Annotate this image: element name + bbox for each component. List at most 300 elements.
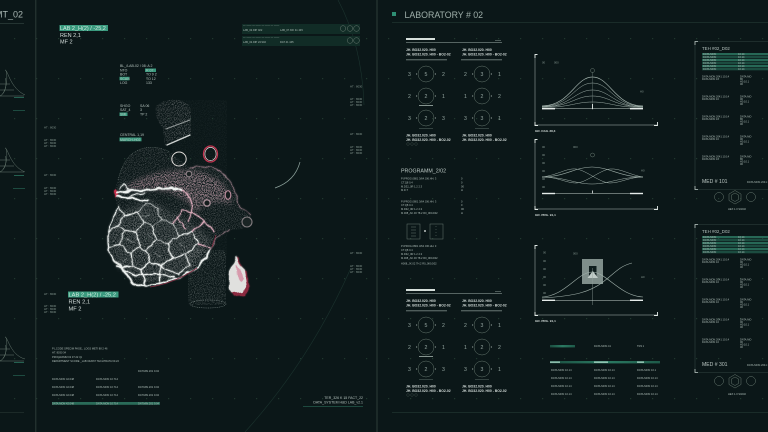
bright arc	[275, 162, 300, 188]
readout: LAB 2 lower: MF 2	[68, 306, 81, 312]
program icons	[407, 224, 443, 239]
laboratory header: LABORATORY # 02	[404, 10, 483, 20]
chart: bell curves: H0	[640, 90, 644, 94]
left tick labels: HT : 8030	[44, 186, 57, 190]
data rows: DATA.MON.2041 10.14	[702, 258, 730, 262]
chart: crossing waves: 00	[542, 153, 546, 157]
right tick labels: HT : 8030	[350, 132, 363, 136]
marker box	[582, 259, 603, 284]
bottom centre table: DATA.MON 10.14	[637, 384, 658, 388]
green rows: DATA.MON	[703, 64, 716, 68]
dial group bottom: JH. BO32.020. H00 - BO2-02	[406, 304, 451, 308]
data rows: DATA.MON 10	[702, 157, 719, 161]
right tick labels: HT : 8030	[350, 264, 363, 268]
bottom centre table: DATA.MON.41	[594, 344, 611, 348]
dial group bottom: JH. BO32.020. H00 - BO2-02	[462, 304, 507, 308]
program listing lower	[401, 244, 438, 266]
footer system label: DATA_SYSTEM H&D LAB_v2.1	[313, 400, 363, 404]
data rows: DATA.MON.2041 10.14	[702, 114, 730, 118]
data rows: DATA.MON 10	[702, 320, 719, 324]
data rows: DATA.MON.2041 10.14	[702, 338, 730, 342]
dials: 3	[408, 367, 411, 373]
green rows: 10.14	[738, 235, 745, 239]
chart: sigmoid with marker: 00	[543, 291, 547, 295]
chart: crossing waves: 00	[542, 185, 546, 189]
dials: 2	[464, 72, 467, 78]
program listing lower: M.008_AK.03 78.2 R0_0K10/02	[401, 256, 438, 260]
readout: LAB 2 top: REN 2,1	[60, 33, 81, 39]
top status table: LAB_02.DIP 022	[243, 28, 263, 32]
chart: sigmoid with marker: 00	[543, 275, 547, 279]
left tick labels	[44, 126, 57, 314]
laboratory header	[392, 10, 768, 23]
green rows: DATA.MON	[703, 238, 716, 242]
bottom-left data table: DATA.MON 42.048	[52, 385, 75, 389]
left tick labels: HT : 8030	[44, 138, 57, 142]
top status table: — —— — —— — —— — ——	[243, 24, 280, 28]
right tick labels: HT : 8030	[350, 267, 363, 271]
bottom-left data table: DAT.MIN.201 9.04	[138, 393, 160, 397]
left edge strip	[0, 0, 378, 432]
chart: sigmoid with marker	[535, 246, 658, 323]
data rows: H0.10.1	[740, 160, 750, 164]
program listing: 0	[461, 180, 463, 184]
data rows: DATA.MON 10	[702, 340, 719, 344]
bottom-left data table: DATA.MON 10.714	[96, 402, 119, 406]
dials	[408, 66, 501, 128]
green rows: DATA.MON	[703, 67, 716, 71]
green rows: DATA.MON	[703, 58, 716, 62]
dials: 3	[464, 116, 467, 122]
dial group bottom: JH. BO32.020. H00	[462, 299, 492, 303]
data rows: H0.10.1	[740, 342, 750, 346]
program listing lower: H008_JK.02 7H.2 R0_0K10/02	[401, 262, 437, 266]
data rows: DATA.MON 10	[702, 260, 719, 264]
green rows: 10.14	[738, 67, 745, 71]
chart: crossing waves: GR. PRG. 91,1	[535, 213, 556, 217]
data rows: DATA.MO	[740, 74, 751, 78]
right tick labels: HT : 8030	[350, 103, 363, 107]
program listing: M.008_AK.03 78.2 R0_0K10/02	[401, 211, 438, 215]
bottom-left data table: DATA.MON 10.714	[96, 393, 119, 397]
dials: 1	[498, 72, 501, 78]
green rows: DATA.MON	[703, 241, 716, 245]
green rows: 10.14	[738, 247, 745, 251]
data rows: 00	[740, 117, 743, 121]
scan readout: TO 9 2	[146, 72, 157, 76]
large scanner arc	[245, 0, 364, 432]
shgo readout: SHGO	[120, 104, 131, 108]
bottom centre table: DATA.MON 10.1	[637, 368, 657, 372]
dials: 3	[481, 116, 484, 122]
chart: sigmoid with marker: 00	[543, 259, 547, 263]
data rows: H0.10.1	[740, 282, 750, 286]
green rows: 10.14	[738, 58, 745, 62]
bottom centre table: DATA.MON 10.14	[594, 392, 615, 396]
chart: bell curves: GR. DAIL 38,3	[535, 129, 556, 133]
icons: bottom hex controls	[714, 374, 756, 396]
scan readout: SCAN	[120, 77, 130, 81]
chart: crossing waves	[535, 140, 658, 217]
green rows: 10.14	[738, 244, 745, 248]
trachea column	[172, 100, 227, 308]
right tick labels: HT : 8030	[350, 84, 363, 88]
dial group top: JH. BO32.020. H00	[406, 48, 436, 52]
dials: 2	[408, 345, 411, 351]
icons: top hex controls: HEX 1.0 S0240	[728, 207, 746, 211]
data rows: 00	[740, 305, 743, 309]
dial group bottom	[406, 289, 507, 396]
dials: 3	[408, 323, 411, 329]
left tick labels: HT : 8030	[44, 192, 57, 196]
panel: TEH bottom: TEH #02_D02	[702, 229, 730, 234]
data rows: 00	[740, 102, 743, 106]
dials: 2	[442, 72, 445, 78]
data rows: 00	[740, 157, 743, 161]
chart: sigmoid with marker: 00	[543, 267, 547, 271]
data rows: DATA.MO	[740, 134, 751, 138]
bottom centre table: DATA.MON 10.14	[637, 392, 658, 396]
dial group top: JH. BO32.020. H00	[406, 134, 436, 138]
dials: 1	[498, 367, 501, 373]
program listing lower: M.D32_0R 1.2 2.3	[401, 252, 423, 256]
dials: 2	[425, 94, 428, 100]
data rows: 00	[740, 82, 743, 86]
chart: sigmoid with marker: 00	[543, 283, 547, 287]
white valve ring	[172, 152, 186, 166]
dial group bottom: JH. BO32.020. H00 - BO2-02	[462, 389, 507, 393]
detached fragment	[229, 256, 250, 296]
shgo readout: SAT_4	[120, 108, 130, 112]
dials: 1	[498, 323, 501, 329]
data rows: H0.10.1	[740, 322, 750, 326]
scan readout: 133	[146, 81, 152, 85]
dials: 2	[481, 94, 484, 100]
chart: crossing waves: 000	[573, 145, 578, 149]
red valve ring	[204, 146, 218, 162]
right tick labels: HT : 8030	[350, 97, 363, 101]
dials: 2	[425, 116, 428, 122]
program listing: CT.Q8 0.4	[401, 203, 413, 207]
program listing lower: PI.PROG.0801 3/64 J06.HH. 3	[401, 244, 437, 248]
chart: sigmoid with marker: 000	[573, 252, 578, 256]
green rows	[702, 52, 768, 71]
data rows: DATA.MO	[740, 258, 751, 262]
panel: TEH bottom: MED # 301	[702, 362, 728, 368]
chart: crossing waves: 00	[542, 177, 546, 181]
data rows: DATA.MON.2041 10.14	[702, 298, 730, 302]
chart: sigmoid with marker: H0	[641, 275, 645, 279]
bottom-left data table: DATA.MON 42.048	[52, 402, 75, 406]
dials: 5	[425, 72, 428, 78]
readout: LAB 2 top: MF 2	[60, 40, 73, 46]
right tick labels	[350, 84, 363, 274]
footer rule	[392, 411, 768, 414]
data rows: DATA.MON.2041 10.14	[702, 278, 730, 282]
readout: LAB 2 lower: LAB 2_H(2) / -25,2	[68, 292, 116, 298]
data rows: 00	[740, 142, 743, 146]
program listing: PI.PROG.0801 3/64 J06.HH. 3	[401, 176, 437, 180]
data rows: DATA.MON.2041 10.14	[702, 154, 730, 158]
data rows: 00	[740, 300, 743, 304]
green rows: 10.14	[738, 238, 745, 242]
program listing: 00	[461, 207, 464, 211]
data rows: DATA.MO	[740, 154, 751, 158]
bottom centre table: TR3 1	[637, 344, 645, 348]
green rows: 10.14	[738, 61, 745, 65]
dials: 3	[442, 116, 445, 122]
chart: crossing waves: H0	[641, 168, 645, 172]
green rows: 10.14	[738, 55, 745, 59]
scan readout: NTO	[120, 68, 128, 72]
bottom centre table: DATA.MON 10.14	[594, 368, 615, 372]
scan readout	[120, 64, 157, 85]
data rows: 00	[740, 280, 743, 284]
right tick labels: HT : 8030	[350, 100, 363, 104]
left tick labels: HT : 8030	[44, 173, 57, 177]
dial group top	[406, 38, 507, 145]
chart: crossing waves: 00	[542, 169, 546, 173]
shgo readout: 3	[140, 108, 142, 112]
data rows: 00	[740, 122, 743, 126]
dial group top: JH. BO32.020. H00	[462, 48, 492, 52]
dials: 1	[464, 345, 467, 351]
dial group top: JH. BO32.020. H00 - BO2-02	[406, 138, 451, 142]
bottom-left data table: DEPARTMENT SCORE _LAB 042067 TECHTRATA 60.22	[52, 359, 119, 363]
top status table: DAT 41 445	[280, 40, 294, 44]
bottom-left data table: HT. 8030 34	[52, 350, 67, 354]
bottom centre table: DATA.MON 10.14	[637, 376, 658, 380]
data rows: DATA.MON.2041 10.14	[702, 134, 730, 138]
bottom-left data table: DAT.MIN.201 9.04	[138, 385, 160, 389]
green rows: DATA.MON	[703, 235, 716, 239]
bottom-left data table: DAT.MIN.201 9.04	[138, 402, 160, 406]
readout: LAB 2 top	[60, 25, 108, 46]
central readout: CENTRAL 1,19	[120, 133, 144, 137]
data rows: H0.10.1	[740, 120, 750, 124]
readout: LAB 2 lower: REN 2,1	[68, 300, 90, 306]
shgo readout	[120, 104, 149, 116]
icons: bottom hex controls: HEX 1.0 S0240	[728, 392, 746, 396]
dials: 3	[481, 323, 484, 329]
bottom centre table: DATA.MON 10.14	[594, 376, 615, 380]
bottom-left data table: DATA.MON 42.048	[52, 393, 75, 397]
data rows	[702, 74, 751, 166]
scan readout: TO 12	[146, 77, 156, 81]
top status table: — —— — —— — —— — ——	[243, 36, 280, 40]
dials: 2	[408, 94, 411, 100]
heart dome and body	[108, 147, 252, 284]
dials: 3	[408, 116, 411, 122]
shgo readout: SA 06	[140, 104, 149, 108]
chart: bell curves: 00	[542, 60, 546, 64]
readout: LAB 2 top: LAB 2_H(2) / -25,2	[60, 26, 106, 32]
data rows: 00	[740, 260, 743, 264]
data rows: 00	[740, 325, 743, 329]
dials: 3	[408, 72, 411, 78]
right tick labels: HT : 8030	[350, 145, 363, 149]
data rows: DATA.MON 10	[702, 300, 719, 304]
top status table: LAB_07.KIK 41 445	[280, 28, 303, 32]
dial group bottom: JH. BO32.020. H00	[406, 299, 436, 303]
mini chart 3	[0, 337, 25, 412]
bottom-left data table: DATA.MON 42.048	[52, 377, 75, 381]
dials: 1	[442, 345, 445, 351]
data rows: H0.10.1	[740, 302, 750, 306]
green rows: DATA.MON	[703, 52, 716, 56]
bottom centre table: DATA.MON 10.14	[551, 368, 572, 372]
data rows: DATA.MON 10	[702, 280, 719, 284]
data rows: DATA.MO	[740, 338, 751, 342]
left tick labels: HT : 8030	[44, 141, 57, 145]
heart model	[108, 100, 252, 308]
bottom-left data table	[52, 346, 160, 406]
bottom-left data table: DAT.MIN.201 9.04	[138, 369, 160, 373]
left tick labels: HT : 8030	[44, 189, 57, 193]
bottom centre table	[550, 344, 660, 396]
data rows: H0.10.1	[740, 262, 750, 266]
shgo readout: SMI	[120, 112, 126, 116]
program listing: M.D32_0R 1.2 2.3	[401, 207, 423, 211]
bottom centre table: DATA.MON 10.14	[551, 376, 572, 380]
bottom-left data table: PROGRAMM 02 37.22 31	[52, 355, 83, 359]
bottom centre table: DATA.MON 10.14	[551, 392, 572, 396]
data rows: 00	[740, 97, 743, 101]
program listing: 0	[461, 203, 463, 207]
data rows: DATA.MO	[740, 298, 751, 302]
dial group top: JH. BO32.020. H00 - BO2-02	[462, 138, 507, 142]
shgo readout: TP 2	[140, 112, 147, 116]
panel: TEH top: MED # 101	[702, 179, 728, 185]
dials: 2	[425, 345, 428, 351]
left tick labels: HT : 8030	[44, 310, 57, 314]
program listing: 00	[461, 184, 464, 188]
dials: 2	[425, 367, 428, 373]
dials: 3	[481, 72, 484, 78]
chart: crossing waves: 00	[542, 161, 546, 165]
icons: top hex controls	[714, 190, 756, 211]
top status table	[242, 24, 360, 46]
readout: LAB 2 lower	[68, 292, 118, 312]
chart: sigmoid with marker: GR. PRG. 91,1	[535, 319, 556, 323]
panel: TEH top	[695, 42, 768, 190]
dials	[408, 317, 501, 380]
bottom-left data table: PI_CODE SPECIM PAGE_ LOGS METI 88 2 46	[52, 346, 108, 350]
chart: crossing waves: 00	[542, 145, 546, 149]
dial group bottom: JH. BO32.020. H00	[462, 384, 492, 388]
upper vessels	[156, 100, 191, 146]
left tick labels: HT : 8030	[44, 126, 57, 130]
chart: bell curves	[535, 54, 658, 133]
data rows: DATA.MON 10	[702, 117, 719, 121]
vein lattice	[108, 204, 214, 285]
program listing: H	[461, 211, 463, 215]
top status table: LAB_02.DIP 24 902	[243, 40, 266, 44]
program listing: PI.PROG.0801 3/64 J06.HH. 3	[401, 200, 437, 204]
dials: 2	[498, 94, 501, 100]
dial group bottom: JH. BO32.020. H00	[406, 384, 436, 388]
scan readout: BOT	[120, 72, 128, 76]
scan readout: BL_/LAB-02 / 08: A 2	[120, 64, 153, 68]
data rows: 00	[740, 77, 743, 81]
program listing: M.D32_0R 1.2 2.3	[401, 184, 423, 188]
data rows: 00	[740, 285, 743, 289]
footer system label	[303, 396, 363, 407]
green rows: DATA.MON	[703, 247, 716, 251]
data rows: DATA.MON.2041 10.14	[702, 94, 730, 98]
left tick labels: HT : 8030	[44, 144, 57, 148]
panel: TEH top: TEH #02_D02	[702, 46, 730, 51]
bottom centre table: DATA.MON 10.14	[594, 384, 615, 388]
mini chart 2	[0, 148, 25, 189]
right tick labels: HT : 8030	[350, 251, 363, 255]
top band	[113, 184, 192, 222]
data rows: DATA.MON.2041 10.14	[702, 74, 730, 78]
dials: 3	[481, 367, 484, 373]
green rows: 10.14	[738, 250, 745, 254]
data rows: H0.10.1	[740, 80, 750, 84]
program listing: H	[461, 188, 463, 192]
red rim	[150, 235, 216, 287]
scan readout: LOG	[120, 81, 128, 85]
mini chart 1	[0, 70, 25, 111]
data rows: 00	[740, 320, 743, 324]
dials: 3	[464, 367, 467, 373]
dials: 1	[498, 116, 501, 122]
central readout	[120, 133, 144, 142]
data rows: DATA.MON 10	[702, 137, 719, 141]
data rows: 00	[740, 162, 743, 166]
dials: 2	[442, 323, 445, 329]
left tick labels: HT : 8030	[44, 292, 57, 296]
program listing	[401, 168, 464, 215]
program listing: PROGRAMM_2/02	[401, 168, 446, 174]
program listing lower: CT.Q8 0.4	[401, 248, 413, 252]
dial group bottom: JH. BO32.020. H00 - BO2-02	[406, 389, 451, 393]
bottom centre table: DATA.MON 10.14	[551, 384, 572, 388]
data rows: 00	[740, 265, 743, 269]
footer system label: TER_326 K 15 FACT_22	[324, 396, 363, 400]
dials: 1	[464, 94, 467, 100]
right tick labels: HT : 8030	[350, 151, 363, 155]
dial group top: JH. BO32.020. H00 - BO2-02	[406, 52, 451, 56]
data rows: 00	[740, 345, 743, 349]
left tick labels: HT : 8030	[44, 307, 57, 311]
green rows: 10.14	[738, 52, 745, 56]
green rows: DATA.MON	[703, 61, 716, 65]
green rows: DATA.MON	[703, 55, 716, 59]
left tick labels: HT : 8030	[44, 304, 57, 308]
green rows: 10.14	[738, 64, 745, 68]
status icons	[340, 26, 359, 43]
program listing: 0	[461, 200, 463, 204]
data rows: DATA.MON 10	[702, 77, 719, 81]
dial group top: JH. BO32.020. H00 - BO2-02	[462, 52, 507, 56]
data rows: H0.10.1	[740, 100, 750, 104]
data rows: DATA.MON.2041 10.14	[702, 318, 730, 322]
bottom-left data table: DATA.MON 10.714	[96, 377, 119, 381]
data rows	[702, 258, 751, 349]
knob and holes	[186, 171, 252, 227]
data rows: DATA.MO	[740, 114, 751, 118]
green rows: 10.14	[738, 241, 745, 245]
dials: 2	[498, 345, 501, 351]
dials: 1	[442, 94, 445, 100]
right tick labels: HT : 8030	[350, 270, 363, 274]
green rows	[702, 235, 768, 254]
chart: bell curves: 000	[554, 60, 559, 64]
scan readout: R 07	[146, 68, 153, 72]
